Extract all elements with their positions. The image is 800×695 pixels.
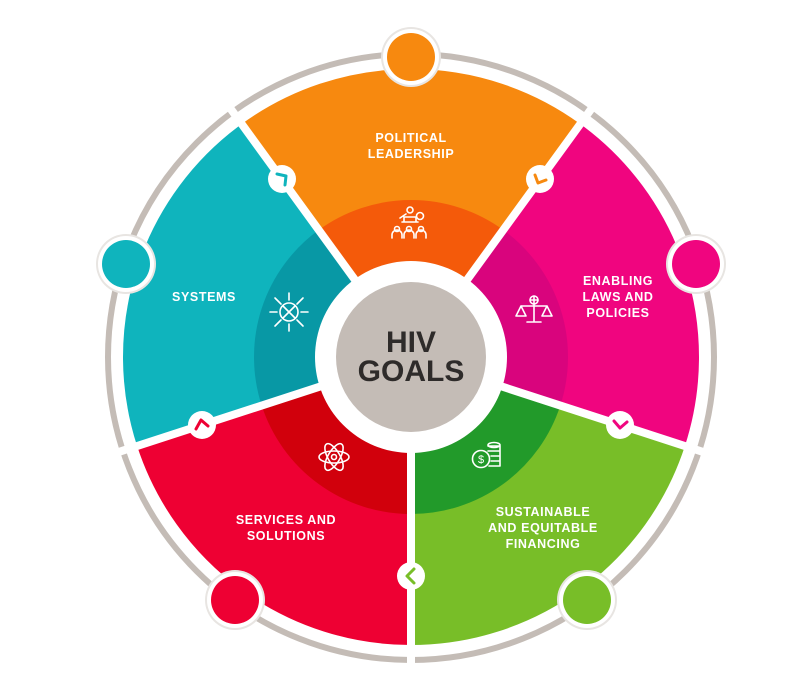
label: systems: SYSTEMS [172,290,236,304]
label: financing: AND EQUITABLE [488,521,598,535]
label: enabling laws and policies: POLICIES [586,306,650,320]
icon: coins [472,442,500,468]
segment: systems [170,116,652,598]
chevron markers [188,165,634,590]
node circles [96,27,726,630]
wheel segments [144,90,678,624]
center circle: HIV goals: HIV [386,326,436,359]
label: services and solutions: SOLUTIONS [247,529,325,543]
icon: leadership podium [392,207,426,238]
label: political leadership: POLITICAL [375,131,447,145]
segment: political leadership [144,90,678,624]
label: enabling laws and policies: ENABLING [583,274,653,288]
icon: scales with globe [516,296,552,322]
icon: atom [319,441,349,473]
segment: services [220,166,602,548]
label: enabling laws and policies: LAWS AND [582,290,654,304]
label: services and solutions: SERVICES AND [236,513,336,527]
outer gray ring [108,54,714,660]
segment: enabling laws [144,90,678,624]
label: financing: FINANCING [506,537,580,551]
segment: financing [170,116,652,598]
icon: systems gear network [270,293,308,331]
label: political leadership: LEADERSHIP [368,147,454,161]
center circle: HIV goals [336,282,486,432]
icon: coins: $ [478,454,484,466]
label: financing: SUSTAINABLE [496,505,590,519]
white inner ring [315,261,507,453]
center circle: HIV goals: GOALS [358,355,464,388]
